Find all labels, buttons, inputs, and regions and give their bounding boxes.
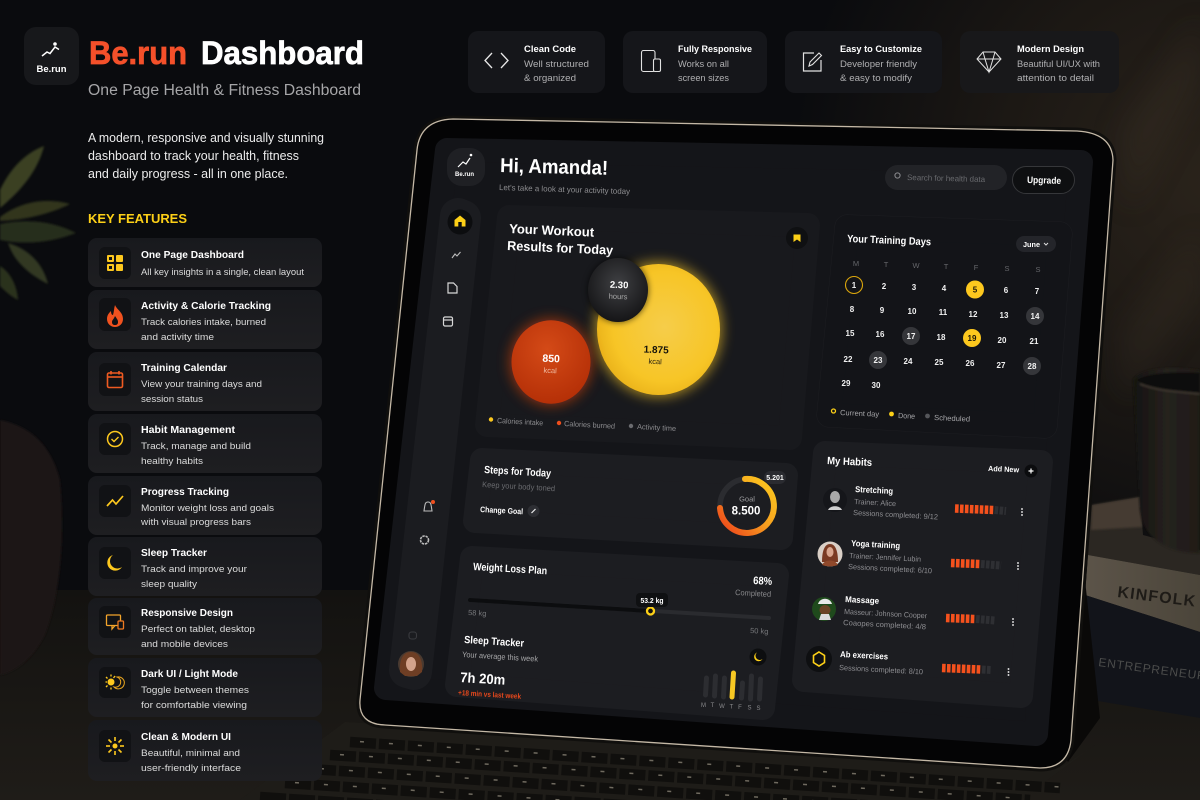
panel: weight loss and sleep: [457, 558, 777, 712]
day numbers: 30: [872, 381, 881, 390]
weight slider: [468, 593, 769, 636]
habit: ab exercises: [806, 646, 1009, 676]
top chip: clean code: [468, 31, 605, 93]
weekday letters: T: [711, 703, 715, 709]
completion stat: [735, 575, 773, 599]
subtitle: One Page Health & Fitness Dashboard: [88, 82, 361, 99]
feature: clean and modern ui: [88, 720, 322, 781]
sleep moon badge: [750, 648, 766, 666]
day numbers: 12: [969, 310, 978, 319]
day numbers: 16: [876, 330, 885, 339]
day numbers: 9: [880, 306, 885, 315]
user avatar: [398, 651, 424, 677]
feature: sleep tracker: Sleep Tracker: [141, 547, 207, 559]
feature: dark ui and light mode: [88, 658, 322, 717]
weight slider: 50 kg: [750, 626, 769, 636]
brand logo tile: [24, 27, 79, 85]
habit: massage: Masseur: Johnson Cooper: [844, 607, 928, 620]
nav: settings icon: [420, 536, 428, 544]
weekday labels: S: [1035, 265, 1041, 274]
top chip: clean code: Well structured: [524, 59, 589, 69]
screen logo tile: Be.run: [455, 171, 474, 178]
red bubble: kcal: [543, 366, 557, 375]
day numbers: 28: [1028, 362, 1037, 371]
brand logo tile: Be.run: [36, 64, 66, 74]
feature: activity and calorie tracking: and activity time: [141, 332, 214, 343]
top chip: modern design: attention to detail: [1017, 73, 1094, 83]
top chip: clean code: Clean Code: [524, 44, 576, 55]
steps heading: [482, 464, 555, 493]
feature: sleep tracker: sleep quality: [141, 579, 197, 590]
habit: stretching: Sessions completed: 9/12: [853, 508, 938, 521]
weight slider: 53.2 kg: [640, 596, 664, 605]
legend: Activity time: [637, 422, 676, 433]
day numbers: 14: [1031, 312, 1040, 321]
feature: responsive design: and mobile devices: [141, 639, 228, 650]
weekday labels: F: [974, 263, 979, 272]
sleep tracker text: [458, 634, 539, 701]
key features heading: KEY FEATURES: [88, 211, 187, 226]
day numbers: 6: [1004, 286, 1009, 295]
day numbers: 20: [998, 336, 1007, 345]
panel: training calendar: [829, 227, 1060, 426]
feature: activity and calorie tracking: [88, 290, 322, 349]
top chip: fully responsive: Works on all: [678, 59, 729, 69]
feature: habit management: Habit Management: [141, 424, 235, 436]
sleep tracker text: +18 min vs last week: [458, 688, 522, 701]
day numbers: 27: [997, 361, 1006, 370]
feature: activity and calorie tracking: Track calories intake, burned: [141, 317, 266, 328]
month selector: [1016, 236, 1056, 252]
calendar legend: [832, 408, 970, 424]
nav: home active: [448, 210, 472, 234]
feature: responsive design: [88, 598, 322, 655]
habit: stretching: [823, 484, 1023, 521]
feature: training calendar: View your training days and: [141, 379, 262, 390]
weekday letters: F: [738, 705, 742, 711]
feature: habit management: [88, 414, 322, 473]
top chip: clean code: & organized: [524, 73, 576, 83]
intro paragraph: [88, 131, 324, 181]
heading: Your Workout: [509, 221, 595, 240]
tablet stand: [1055, 580, 1100, 762]
heading: [507, 221, 614, 258]
greeting: Hi, Amanda!: [500, 155, 608, 180]
upgrade button: [1012, 166, 1074, 194]
nav: chat icon: [409, 632, 416, 639]
top chip: easy to customize: & easy to modify: [840, 73, 913, 83]
day numbers: 25: [935, 358, 944, 367]
day numbers: 26: [966, 359, 975, 368]
day numbers: 1: [852, 281, 857, 290]
day numbers: 22: [844, 355, 853, 364]
top chip: fully responsive: Fully Responsive: [678, 44, 752, 55]
screen logo tile: [447, 148, 485, 186]
day numbers: 5: [973, 286, 978, 294]
habit: massage: [812, 594, 1014, 631]
day numbers: 2: [882, 282, 887, 291]
greeting: Let's take a look at your activity today: [499, 183, 630, 196]
feature: progress tracking: Monitor weight loss and goals: [141, 503, 274, 514]
feature: clean and modern ui: Beautiful, minimal and: [141, 748, 240, 759]
weekday letters: S: [747, 706, 752, 712]
weekday letters: T: [730, 704, 734, 710]
habit: ab exercises: Sessions completed: 8/10: [839, 663, 923, 676]
habit: stretching: Stretching: [855, 484, 893, 496]
weekday letters: M: [701, 703, 706, 709]
nav: calendar icon: [444, 317, 452, 326]
title: Be.run: [89, 35, 187, 71]
panel: workout results: [487, 217, 808, 438]
goal ring: 8.500: [732, 506, 760, 518]
keyboard: [240, 722, 1095, 800]
habits heading: My Habits: [827, 455, 872, 469]
habit: yoga training: Trainer: Jennifer Lubin: [849, 551, 921, 564]
day numbers: 29: [842, 379, 851, 388]
weekly sleep bars: [706, 673, 760, 699]
feature: progress tracking: Progress Tracking: [141, 486, 229, 498]
weekday labels: S: [1004, 264, 1010, 273]
feature: progress tracking: [88, 476, 322, 535]
top chip: fully responsive: screen sizes: [678, 73, 729, 83]
feature: one page dashboard: All key insights in a single, clean layout: [141, 267, 304, 278]
coffee mug: [1133, 368, 1200, 553]
title: Dashboard: [201, 35, 364, 71]
day numbers: 18: [937, 333, 946, 342]
feature: dark ui and light mode: Toggle between themes: [141, 685, 249, 696]
calendar legend: Done: [898, 411, 915, 421]
completion stat: Completed: [735, 588, 771, 599]
red bubble: [509, 318, 593, 406]
stacked books: [1085, 497, 1200, 718]
feature: clean and modern ui: Clean & Modern UI: [141, 731, 231, 743]
day numbers: [842, 281, 1040, 390]
yellow bubble: 1.875: [643, 344, 669, 357]
change goal control: Change Goal: [480, 505, 523, 516]
sleep tracker text: Sleep Tracker: [464, 634, 524, 650]
panel: steps for today: [475, 460, 786, 538]
weekday labels: T: [944, 262, 949, 271]
feature: sleep tracker: [88, 537, 322, 596]
intro paragraph: A modern, responsive and visually stunning: [88, 131, 324, 145]
feature: dark ui and light mode: Dark UI / Light Mode: [141, 668, 238, 680]
habit: yoga training: Yoga training: [851, 538, 900, 551]
legend: Calories intake: [497, 416, 543, 427]
day numbers: 11: [939, 308, 948, 317]
top chip: fully responsive: [623, 31, 767, 93]
heading: Your Training Days: [847, 233, 931, 248]
feature: responsive design: Perfect on tablet, desktop: [141, 624, 255, 635]
feature: activity and calorie tracking: Activity & Calorie Tracking: [141, 300, 271, 312]
weekday labels: M: [853, 259, 859, 268]
weight heading: Weight Loss Plan: [473, 561, 547, 577]
calendar legend: Current day: [840, 408, 880, 419]
feature: one page dashboard: [88, 238, 322, 287]
dark bubble: 2.30: [610, 280, 629, 291]
book title: KINFOLK: KINFOLK: [1117, 584, 1196, 611]
title: [89, 35, 364, 71]
feature: training calendar: session status: [141, 394, 203, 405]
weekday letters: S: [756, 706, 761, 712]
goal ring: 5.201: [766, 475, 784, 482]
feature: habit management: Track, manage and build: [141, 441, 251, 452]
feature: dark ui and light mode: for comfortable viewing: [141, 700, 247, 711]
day numbers: 17: [907, 332, 916, 341]
nav: chart icon: [452, 252, 460, 258]
feature: progress tracking: with visual progress bars: [140, 517, 251, 528]
dark bubble: [587, 257, 649, 323]
plant leaves: [0, 146, 76, 300]
sleep tracker text: Your average this week: [462, 650, 539, 664]
add new button: Add New: [988, 464, 1019, 474]
search box: Search for health data: [907, 173, 986, 184]
day numbers: 23: [874, 356, 883, 365]
nav: file icon: [448, 283, 457, 293]
search box: [885, 165, 1007, 190]
weekday letters: W: [719, 704, 725, 710]
top chip: easy to customize: [785, 31, 942, 93]
habit: ab exercises: Ab exercises: [840, 649, 889, 662]
day numbers: 19: [968, 334, 977, 343]
weekday labels: W: [912, 261, 920, 270]
yellow bubble: kcal: [648, 357, 662, 366]
nav: bell icon: [424, 500, 435, 511]
goal ring: [720, 471, 786, 533]
habit: stretching: Trainer: Alice: [854, 497, 896, 508]
completion stat: 68%: [753, 575, 773, 588]
bookmark button: [786, 227, 808, 249]
habit: massage: Massage: [845, 594, 880, 606]
habit: yoga training: [818, 538, 1019, 575]
day numbers: 24: [904, 357, 913, 366]
habit: yoga training: Sessions completed: 6/10: [848, 562, 932, 575]
feature: clean and modern ui: user-friendly interface: [141, 763, 241, 774]
legend: [489, 416, 676, 433]
dark bubble: hours: [609, 292, 628, 301]
feature: habit management: healthy habits: [141, 456, 203, 467]
day numbers: 15: [846, 329, 855, 338]
top chip: easy to customize: Developer friendly: [840, 59, 918, 69]
day numbers: 10: [908, 307, 917, 316]
sidebar: [398, 210, 472, 677]
tablet body: [360, 119, 1113, 768]
month selector: June: [1023, 240, 1040, 249]
feature: responsive design: Responsive Design: [141, 607, 233, 619]
top chip: easy to customize: Easy to Customize: [840, 44, 922, 55]
top chip: modern design: Modern Design: [1017, 44, 1084, 55]
heading: Results for Today: [507, 238, 614, 258]
day numbers: 21: [1030, 337, 1039, 346]
day numbers: 7: [1035, 287, 1040, 296]
steps heading: Keep your body toned: [482, 480, 555, 493]
add new button: [988, 464, 1038, 478]
intro paragraph: and daily progress - all in one place.: [88, 167, 288, 181]
top chip: modern design: [960, 31, 1119, 93]
red bubble: 850: [542, 353, 560, 365]
feature: one page dashboard: One Page Dashboard: [141, 249, 244, 261]
weekday labels: T: [884, 260, 889, 269]
day numbers: 4: [942, 284, 947, 293]
day numbers: 8: [850, 305, 855, 314]
day numbers: 13: [1000, 311, 1009, 320]
yellow bubble: [594, 262, 722, 398]
top chip: modern design: Beautiful UI/UX with: [1017, 59, 1100, 69]
panel: my habits: [804, 453, 1041, 696]
sleep tracker text: 7h 20m: [460, 669, 506, 688]
upgrade button: Upgrade: [1027, 175, 1061, 187]
vase: [0, 420, 62, 675]
feature: sleep tracker: Track and improve your: [141, 564, 247, 575]
greeting: [499, 155, 630, 196]
weight slider: 58 kg: [468, 608, 487, 618]
goal ring: Goal: [739, 494, 755, 504]
day markers: [846, 276, 1044, 375]
tablet screen: [386, 150, 1081, 734]
weekday letters: [701, 703, 761, 712]
steps heading: Steps for Today: [484, 464, 552, 480]
weekday labels: [853, 259, 1041, 274]
intro paragraph: dashboard to track your health, fitness: [88, 149, 299, 163]
day numbers: 3: [912, 283, 917, 292]
habit: massage: Coaopes completed: 4/8: [843, 618, 926, 631]
feature: training calendar: [88, 352, 322, 411]
calendar legend: Scheduled: [934, 413, 970, 424]
legend: Calories burned: [564, 419, 615, 431]
feature: training calendar: Training Calendar: [141, 362, 227, 374]
